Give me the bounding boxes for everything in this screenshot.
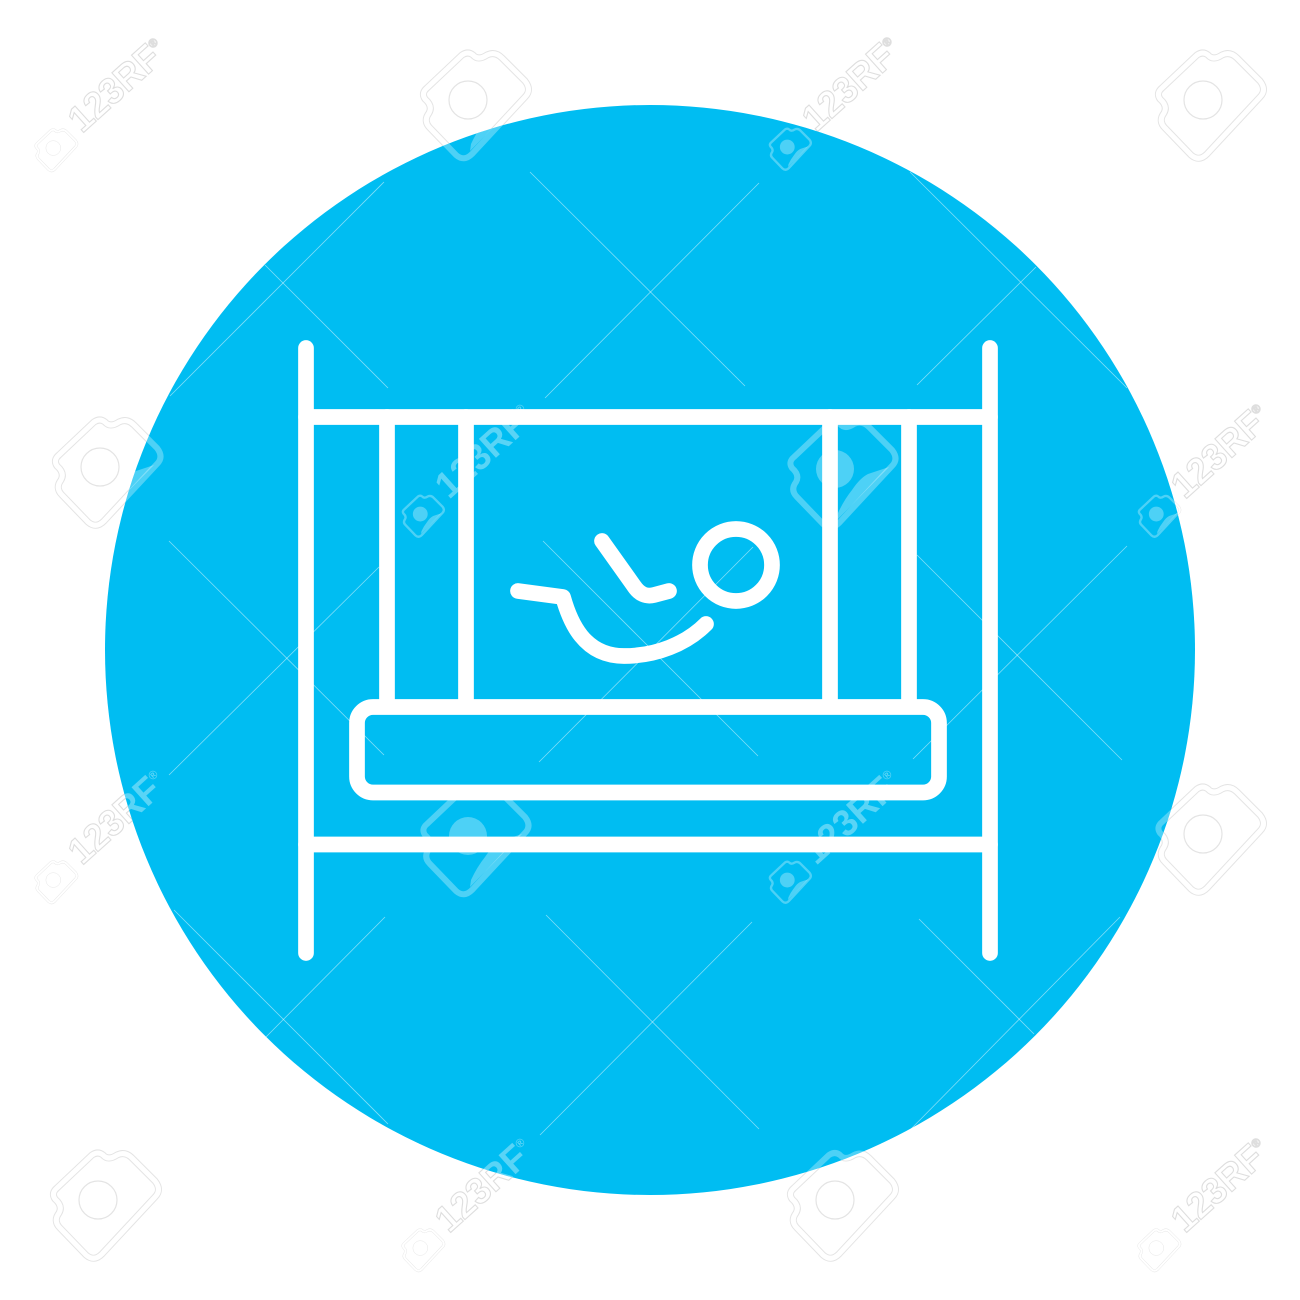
crib bottom rail — [306, 837, 990, 852]
baby arm — [602, 541, 669, 596]
watermark stamps tinted on circle: 123RF — [427, 1135, 537, 1240]
watermark stamps on white background: ® — [512, 401, 528, 417]
icon: baby crib — [306, 348, 990, 953]
watermark stamps tinted on circle: ® — [512, 1135, 528, 1151]
crib bars — [387, 417, 909, 706]
watermark stamps on white background: 123RF — [1163, 1135, 1273, 1240]
crib top rail — [306, 409, 990, 425]
watermark stamps tinted on circle: ® — [1248, 401, 1264, 417]
mattress — [357, 707, 939, 792]
watermark stamps on white background: 123RF — [60, 35, 170, 140]
watermark stamps on white background: 123RF — [60, 767, 170, 872]
watermark stamps tinted on circle — [124, 125, 1178, 1177]
baby head — [700, 529, 772, 601]
baby body and leg — [518, 591, 706, 656]
watermark stamps on white background: ® — [1248, 401, 1264, 417]
crib left post — [298, 348, 314, 953]
watermark stamps on white background: ® — [879, 34, 895, 50]
watermark stamps on white background: 123RF — [794, 767, 904, 872]
watermark stamps on white background: 123RF — [427, 1135, 537, 1240]
watermark stamps on white background: ® — [145, 767, 161, 783]
watermark stamps tinted on circle: 123RF — [794, 767, 904, 872]
watermark stamps on white background: ® — [879, 767, 895, 783]
watermark stamps on white background: 123RF — [427, 401, 537, 506]
watermark stamps tinted on circle: 123RF — [1163, 401, 1273, 506]
watermark stamps on white background: 123RF — [1163, 401, 1273, 506]
watermark stamps tinted on circle: 123RF — [60, 767, 170, 872]
watermark stamps on white background: ® — [512, 1135, 528, 1151]
watermark stamps on white background: 123RF — [794, 34, 904, 139]
blue circle background — [105, 105, 1195, 1195]
crib right post — [982, 348, 998, 953]
watermark stamps tinted on circle: ® — [512, 401, 528, 417]
watermark stamps tinted on circle: 123RF — [794, 34, 904, 139]
watermark stamps tinted on circle: 123RF — [427, 401, 537, 506]
watermark stamps on white background: ® — [145, 35, 161, 51]
watermark stamps tinted on circle: ® — [879, 767, 895, 783]
watermark stamps on white background: ® — [1248, 1135, 1264, 1151]
watermark stamps tinted on circle: ® — [879, 34, 895, 50]
watermark stamps tinted on circle: ® — [145, 767, 161, 783]
